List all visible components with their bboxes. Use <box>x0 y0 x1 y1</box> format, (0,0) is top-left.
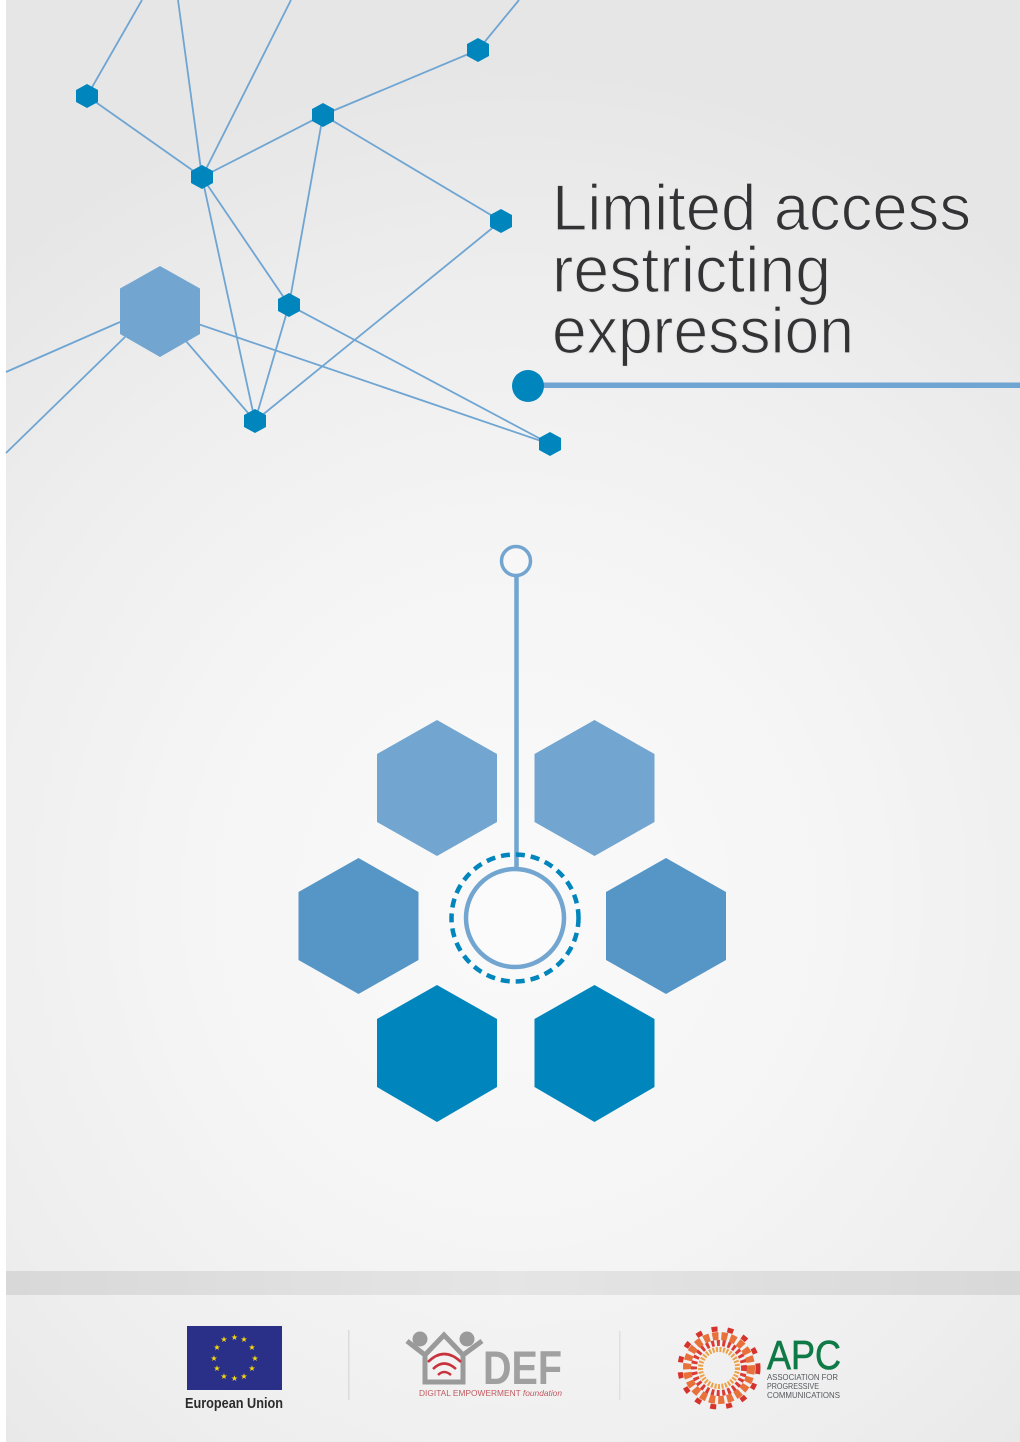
logo: European Union: ★ <box>213 1343 221 1352</box>
title: Limited access <box>552 171 971 244</box>
logo: APC: ASSOCIATION FOR <box>767 1373 838 1382</box>
hexagon cluster <box>298 720 726 1122</box>
title <box>552 171 971 367</box>
logo: APC: APC <box>767 1332 841 1378</box>
logo: European Union: ★ <box>248 1343 256 1352</box>
logo: APC: COMMUNICATIONS <box>767 1391 841 1400</box>
logo: Digital Empowerment Foundation: DIGITAL EMPOWERMENT foundation <box>419 1388 562 1398</box>
logo: European Union: ★ <box>220 1335 228 1344</box>
logo: APC <box>680 1329 841 1407</box>
logo: European Union: ★ <box>251 1354 259 1363</box>
logo: Digital Empowerment Foundation <box>407 1332 562 1398</box>
logo: Digital Empowerment Foundation: DEF <box>483 1341 562 1394</box>
logo: APC: PROGRESSIVE <box>767 1382 819 1391</box>
logo: European Union: ★ <box>213 1364 221 1373</box>
logo: European Union: ★ <box>240 1372 248 1381</box>
logo: European Union: ★ <box>210 1354 218 1363</box>
logo: European Union <box>185 1326 283 1412</box>
logo: European Union: European Union <box>185 1395 283 1412</box>
title underline with dot <box>512 370 1020 402</box>
title: expression <box>552 294 854 367</box>
footer bar <box>6 1271 1020 1295</box>
pin and central circle <box>452 546 578 982</box>
logo: European Union: ★ <box>220 1372 228 1381</box>
divider <box>348 1330 350 1400</box>
divider <box>619 1331 620 1400</box>
logo: European Union: ★ <box>231 1333 238 1342</box>
logo: European Union: ★ <box>240 1335 248 1344</box>
logo: European Union: ★ <box>248 1364 256 1373</box>
title: restricting <box>552 233 831 306</box>
network graphic <box>6 0 561 456</box>
logo: European Union: ★ <box>231 1374 238 1383</box>
